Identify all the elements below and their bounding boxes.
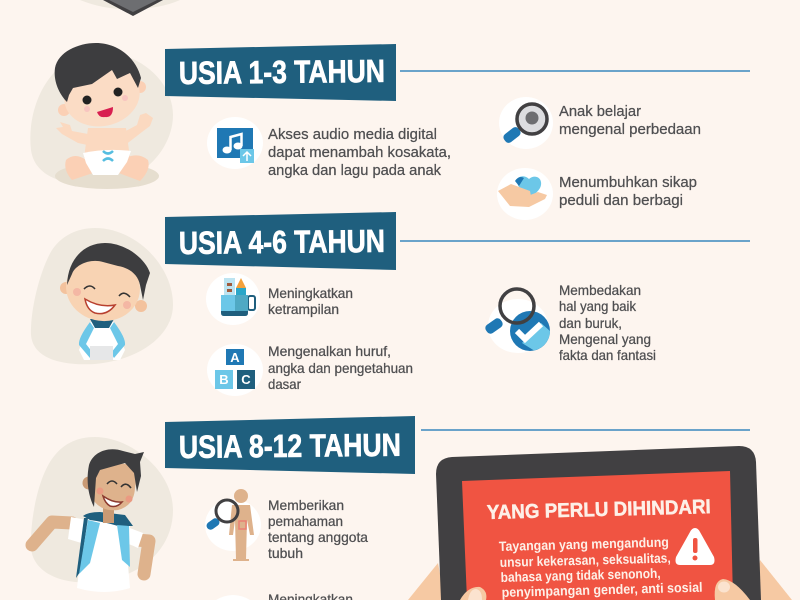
text: memberikan pemahaman: pemahaman <box>268 513 343 529</box>
text: menumbuhkan: Menumbuhkan sikap <box>559 174 697 191</box>
icon: magnifier with check <box>484 289 550 353</box>
text: akses audio: angka dan lagu pada anak <box>268 162 441 179</box>
text: membedakan <box>559 282 656 363</box>
heading: USIA 1-3 TAHUN <box>165 44 396 101</box>
heading: USIA 8-12 TAHUN: USIA 8-12 TAHUN <box>179 427 401 465</box>
text: mengenalkan huruf: dasar <box>268 376 301 392</box>
icon: hand with heart <box>497 168 553 220</box>
text: membedakan: dan buruk, <box>559 315 622 331</box>
icon: music file <box>207 117 263 169</box>
heading: USIA 1-3 TAHUN: USIA 1-3 TAHUN <box>179 53 385 91</box>
text: akses audio: Akses audio media digital <box>268 126 437 143</box>
illustration: baby <box>30 43 173 189</box>
illustration: older child with backpack <box>31 437 173 592</box>
text: membedakan: Membedakan <box>559 282 641 298</box>
text: meningkatkan ketrampilan: Meningkatkan <box>268 285 353 301</box>
warning text: bahasa yang tidak senonoh, <box>500 566 661 585</box>
icon: partial bottom circle <box>216 595 250 600</box>
text: membedakan: Mengenal yang <box>559 331 651 347</box>
hands <box>408 560 792 600</box>
heading: USIA 8-12 TAHUN <box>165 416 415 474</box>
heading: USIA 4-6 TAHUN <box>165 212 396 270</box>
warning title: YANG PERLU DIHINDARI <box>487 496 711 524</box>
text: meningkatkan ketrampilan <box>268 285 353 317</box>
icon: ABC blocks <box>207 344 263 396</box>
warning text: penyimpangan gender, anti sosial <box>501 580 703 600</box>
text: memberikan pemahaman: tubuh <box>268 545 303 561</box>
text: memberikan pemahaman <box>268 497 368 561</box>
text: mengenalkan huruf: Mengenalkan huruf, <box>268 343 391 359</box>
text: anak belajar <box>559 103 701 138</box>
thumbs <box>460 579 750 600</box>
text: membedakan: hal yang baik <box>559 298 637 314</box>
text: akses audio <box>268 126 451 179</box>
icon: ABC blocks: B <box>219 372 229 387</box>
heading: USIA 4-6 TAHUN: USIA 4-6 TAHUN <box>179 223 385 261</box>
text: memberikan pemahaman: tentang anggota <box>268 529 368 545</box>
icon: ABC blocks: C <box>241 372 251 387</box>
warning text: unsur kekerasan, seksualitas, <box>500 551 671 570</box>
text: akses audio: dapat menambah kosakata, <box>268 144 451 161</box>
illustration: child <box>31 228 173 364</box>
text: membedakan: fakta dan fantasi <box>559 347 656 363</box>
warning text <box>499 534 703 600</box>
icon: mug with stationery <box>206 273 260 325</box>
text: menumbuhkan: peduli dan berbagi <box>559 192 683 209</box>
warning text: Tayangan yang mengandung <box>499 535 669 554</box>
icon: body under magnifier <box>205 489 261 561</box>
tablet body <box>436 446 761 600</box>
text: anak belajar: Anak belajar <box>559 103 641 120</box>
text: anak belajar: mengenal perbedaan <box>559 121 701 138</box>
text: mengenalkan huruf: angka dan pengetahuan <box>268 360 413 376</box>
icon: ABC blocks: A <box>230 350 240 365</box>
text: menumbuhkan <box>559 174 697 209</box>
text: mengenalkan huruf <box>268 343 413 392</box>
text: memberikan pemahaman: Memberikan <box>268 497 344 513</box>
text: meningkatkan ketrampilan: ketrampilan <box>268 301 339 317</box>
icon: warning triangle <box>676 528 714 565</box>
icon: magnifier eye <box>499 97 553 149</box>
top device fragment <box>80 0 180 16</box>
screen <box>462 471 733 600</box>
tablet with warning <box>408 446 792 600</box>
